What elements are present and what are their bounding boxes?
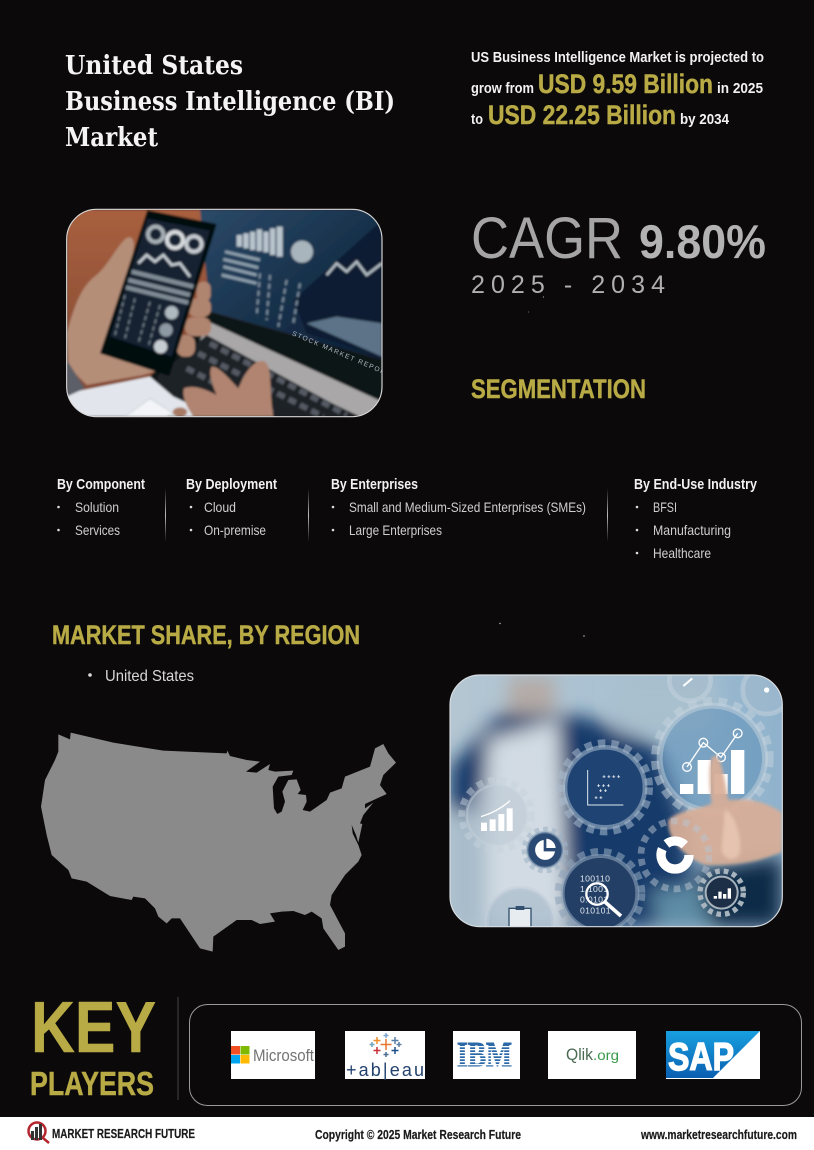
CAGR period: 2025 - 2034 bbox=[471, 271, 665, 299]
heading: market share by region: MARKET SHARE, BY REGION bbox=[52, 620, 360, 650]
photo: phone and laptop dashboards bbox=[67, 209, 392, 417]
footer bar: Copyright © 2025 Market Research Future bbox=[315, 1128, 521, 1142]
logo: Microsoft: Microsoft bbox=[253, 1046, 314, 1065]
blurred person bbox=[450, 675, 782, 927]
holding hand bbox=[67, 236, 158, 386]
heading: key players: KEY bbox=[31, 988, 156, 1068]
logo: Tableau: +ab|eau bbox=[346, 1060, 424, 1080]
logo: Qlik: Qlik bbox=[566, 1045, 593, 1064]
segmentation: by deployment bbox=[186, 476, 277, 538]
back hand fingers bbox=[177, 282, 211, 357]
logo: Qlik bbox=[548, 1031, 636, 1079]
photo: phone and laptop dashboards: STOCK MARKET REPORT bbox=[291, 330, 392, 379]
title: Market bbox=[65, 123, 158, 153]
front hand bbox=[183, 361, 273, 417]
segmentation: by deployment: On-premise bbox=[204, 522, 266, 538]
logo: Microsoft bbox=[231, 1031, 315, 1079]
segmentation: by deployment: Cloud bbox=[204, 499, 236, 515]
market projection text bbox=[471, 49, 764, 130]
gear: donut bbox=[641, 821, 709, 889]
gear: binary data: 010101 bbox=[580, 905, 611, 915]
laptop body bbox=[150, 312, 382, 417]
heading: segmentation: SEGMENTATION bbox=[471, 374, 646, 404]
logo: Qlik: .org bbox=[593, 1047, 619, 1063]
logo: Tableau bbox=[345, 1031, 425, 1080]
market projection text: grow from bbox=[471, 80, 534, 97]
CAGR: 9.80% bbox=[639, 215, 766, 268]
segmentation: by end-use industry: BFSI bbox=[653, 499, 677, 515]
gear: small bars bbox=[700, 871, 743, 914]
region list: United States bbox=[105, 668, 194, 685]
laptop screen bbox=[200, 209, 382, 360]
market projection text: to bbox=[471, 111, 483, 128]
icon: market research future logo bbox=[28, 1122, 49, 1143]
heading: key players bbox=[30, 988, 156, 1102]
gear: line chart bbox=[655, 701, 770, 816]
phone bbox=[100, 210, 217, 376]
gear: pie bbox=[524, 829, 566, 871]
segmentation: by end-use industry: Healthcare bbox=[653, 545, 711, 561]
gear: scatter: + + bbox=[594, 795, 603, 801]
market projection text: USD 22.25 Billion bbox=[488, 100, 676, 130]
title bbox=[65, 51, 395, 153]
market projection text: USD 9.59 Billion bbox=[538, 69, 713, 99]
map: United States bbox=[41, 733, 396, 952]
segmentation: by deployment: By Deployment bbox=[186, 476, 277, 493]
heading: key players: PLAYERS bbox=[30, 1065, 154, 1102]
title: United States bbox=[65, 51, 243, 81]
segmentation: by enterprises: By Enterprises bbox=[331, 476, 418, 493]
segmentation: by component: Solution bbox=[75, 499, 119, 515]
gear: binary data bbox=[558, 852, 642, 935]
gear: scatter: + + + bbox=[597, 783, 611, 789]
gear: binary data: 1.1001 bbox=[580, 884, 608, 894]
gear: scatter bbox=[561, 743, 649, 831]
segmentation: by end-use industry bbox=[634, 476, 758, 561]
pointing hand bbox=[668, 756, 782, 865]
segmentation: by end-use industry: Manufacturing bbox=[653, 522, 731, 538]
title: Business Intelligence (BI) bbox=[65, 87, 395, 117]
market projection text: by 2034 bbox=[680, 111, 730, 128]
logo: SAP: SAP bbox=[668, 1036, 734, 1079]
gear: clipboard bbox=[488, 886, 553, 926]
segmentation: by enterprises: Large Enterprises bbox=[349, 522, 442, 538]
CAGR: CAGR bbox=[471, 206, 623, 271]
CAGR bbox=[471, 206, 766, 271]
panel: key player logos bbox=[190, 1004, 802, 1106]
segmentation: by component bbox=[57, 476, 145, 538]
segmentation: by component: Services bbox=[75, 522, 120, 538]
screen bar chart bbox=[237, 227, 283, 257]
segmentation: by component: By Component bbox=[57, 476, 145, 493]
top gears bbox=[667, 676, 782, 716]
segmentation: by enterprises bbox=[331, 476, 586, 538]
footer bar bbox=[0, 1117, 814, 1150]
gear: binary data: 0.0101 bbox=[580, 895, 608, 905]
market projection text: in 2025 bbox=[717, 80, 763, 97]
segmentation: by end-use industry: By End-Use Industry bbox=[634, 476, 758, 493]
logo: IBM: IBM bbox=[457, 1035, 512, 1074]
footer bar: MARKET RESEARCH FUTURE bbox=[52, 1127, 195, 1141]
gear: growth chart bbox=[462, 780, 532, 850]
photo: business analytics gears bbox=[449, 674, 783, 928]
segmentation: by enterprises: Small and Medium-Sized Enterprises (SMEs) bbox=[349, 499, 586, 515]
gear: binary data: 100110 bbox=[580, 873, 610, 883]
gear: scatter: + + + + bbox=[602, 774, 621, 780]
gear: scatter: + + bbox=[599, 789, 608, 795]
market projection text: US Business Intelligence Market is projected to bbox=[471, 49, 764, 66]
